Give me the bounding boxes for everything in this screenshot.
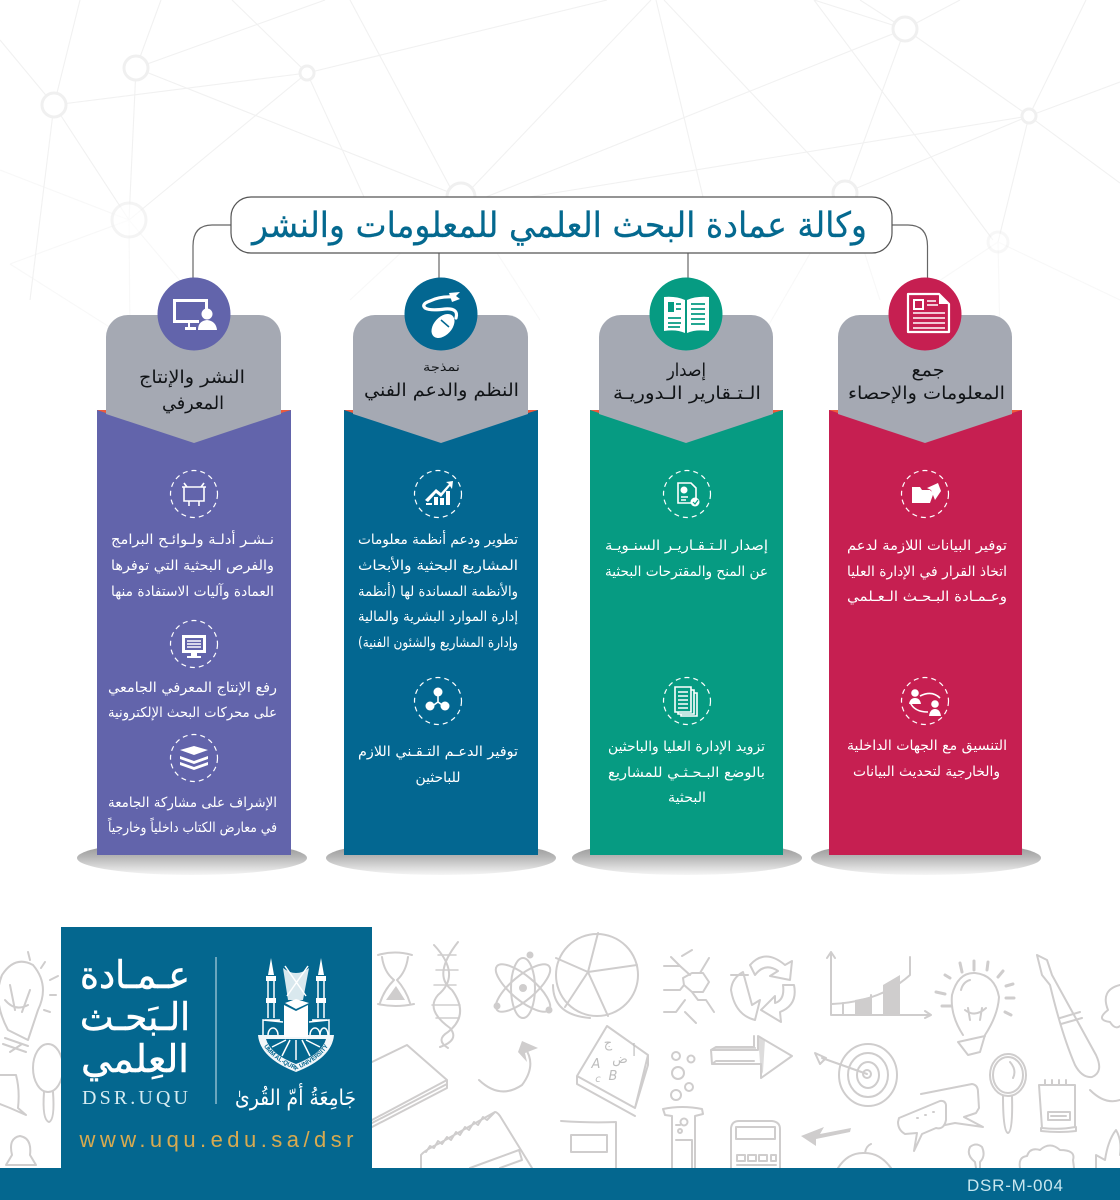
item: develop systems: تطوير ودعم أنظمة معلومات (358, 530, 518, 548)
DSR.UQU: DSR.UQU (82, 1087, 189, 1109)
item: publish guides: العمادة وآليات الاستفادة منها (111, 583, 274, 600)
doodle: hexagons (664, 950, 714, 1023)
doodle: letters: أ (632, 1043, 636, 1060)
connector: left (193, 225, 231, 279)
item: publish guides: والفرص البحثية التي توفرها (111, 558, 274, 574)
doodle: arrow (711, 1036, 792, 1078)
header (106, 315, 281, 443)
doodle: recycle (731, 956, 795, 1022)
item: raise knowledge output: رفع الإنتاج المعرفي الجامعي (108, 680, 277, 696)
item: supply status: بالوضع البـحـثـي للمشاريع (608, 765, 765, 781)
item: provide data (847, 470, 1007, 605)
item: develop systems: والأنظمة المساندة لها (أنظمة (358, 582, 518, 600)
item: develop systems: المشاريع البحثية والأبحاث (358, 556, 518, 574)
doodle: line chart (827, 952, 931, 1018)
university emblem (258, 958, 334, 1072)
doodle: letters: ج (604, 1036, 613, 1051)
item: supply status: تزويد الإدارة العليا والباحثين (608, 739, 765, 755)
doodle: atom (489, 952, 557, 1019)
item: publish guides: نـشـر أدلـة ولـوائـح البرامج (111, 530, 274, 548)
item: technical support (358, 678, 518, 786)
doodle: fountain pen (1037, 955, 1099, 1077)
item: coordination: والخارجية لتحديث البيانات (853, 764, 1000, 780)
header: المعلومات والإحصاء (848, 383, 1005, 404)
doodle: small left arrow (801, 1127, 851, 1146)
doodle: spiral notebook (421, 1112, 532, 1168)
doodle: left bulb (0, 952, 58, 1052)
item: raise knowledge output (108, 620, 277, 721)
item: supply status (608, 678, 765, 806)
panel: collecting information and statistics (811, 278, 1041, 875)
item: book fairs: في معارض الكتاب داخلياً وخارجياً (108, 817, 277, 836)
header: إصدار (666, 360, 706, 381)
item: coordination: التنسيق مع الجهات الداخلية (847, 738, 1007, 754)
doodle: pie chart (553, 933, 638, 1018)
doodle: right bulb (936, 961, 1014, 1055)
item: book fairs (108, 734, 277, 836)
doodle: right magnifier (990, 1054, 1026, 1133)
doodle: left magnifier (33, 1044, 63, 1122)
footer doodles (0, 933, 1120, 1168)
icon: open report book (650, 278, 722, 350)
panel: systems modelling and technical support (326, 278, 556, 875)
header: النظم والدعم الفني (364, 380, 519, 401)
item: annual reports: عن المنح والمقترحات البحثية (605, 564, 768, 580)
header (838, 315, 1012, 443)
deanship name: عـمـادة (80, 953, 190, 997)
icon: wrench and mouse (404, 278, 478, 350)
document code: DSR-M-004 (967, 1176, 1063, 1195)
item: annual reports (605, 470, 768, 580)
doodle: DNA (432, 942, 460, 1048)
item: supply status: البحثية (668, 790, 706, 806)
connector: centre left (438, 253, 440, 279)
item: technical support: للباحثين (416, 770, 460, 786)
doodle: bottom book (561, 1121, 616, 1168)
doodle: left speech (0, 1075, 26, 1115)
doodle: notepad (1039, 1080, 1076, 1132)
icon: document (888, 278, 962, 350)
doodle: stamp (6, 1136, 36, 1165)
item: publish guides (111, 470, 274, 600)
doodle: stacked books (372, 1045, 447, 1127)
panel: issuing periodic reports (572, 278, 802, 875)
connector: centre right (687, 253, 689, 279)
item: develop systems: وإدارة المشاريع والشئون الفنية) (358, 635, 518, 651)
doodle: hourglass (378, 952, 414, 1006)
header (599, 315, 773, 443)
doodle: letters: B (609, 1069, 618, 1084)
item: coordination (847, 678, 1007, 780)
panel: publishing and knowledge production (77, 278, 307, 875)
doodle: bottom shapes (969, 1130, 1120, 1168)
title: وكالة عمادة البحث العلمي للمعلومات والنشر (250, 206, 867, 246)
deanship name (80, 953, 190, 1081)
header: النشر والإنتاج (139, 367, 245, 388)
doodle: letters: ض (612, 1052, 628, 1067)
doodle: test tube (663, 1107, 703, 1168)
doodle: letters: A (591, 1057, 600, 1072)
item: raise knowledge output: على محركات البحث الإلكترونية (108, 705, 277, 721)
header: نمذجة (423, 360, 460, 374)
doodle: target (815, 1044, 897, 1106)
doodle: letters (591, 1036, 636, 1085)
item: annual reports: إصدار الـتـقـاريـر السنـويـة (605, 538, 768, 554)
header: جمع (912, 360, 944, 381)
item: technical support: توفير الدعـم التـقـني اللازم (358, 744, 518, 760)
doodle: speech bubbles (898, 1084, 983, 1151)
item: develop systems (358, 470, 518, 651)
background network nodes (42, 17, 1036, 252)
header: الـتـقارير الـدوريـة (613, 383, 761, 404)
divider (215, 957, 217, 1104)
item: book fairs: الإشراف على مشاركة الجامعة (108, 795, 277, 811)
item: provide data: وعـمـادة البـحـث الـعـلمي (847, 589, 1007, 605)
icon: presenter at screen (158, 278, 230, 350)
header (353, 315, 528, 443)
item: provide data: اتخاذ القرار في الإدارة العليا (847, 564, 1007, 580)
doodle: apple (838, 1144, 891, 1168)
doodle: alphabet book (577, 1026, 648, 1116)
deanship name: الـبَحـث (80, 995, 190, 1039)
doodle: bubbles (671, 1052, 694, 1100)
header: المعرفي (162, 393, 224, 414)
title box (231, 197, 892, 253)
deanship name: العِلمي (81, 1037, 189, 1081)
doodle: curved arrow (479, 1041, 538, 1091)
item: develop systems: إدارة الموارد البشرية والمالية (358, 609, 518, 625)
item: provide data: توفير البيانات اللازمة لدعم (847, 538, 1007, 554)
connector: right (892, 225, 928, 279)
university arabic name: جَامِعَةُ أمّ القُرىٰ (235, 1083, 356, 1111)
doodle: letters: c (595, 1074, 601, 1085)
university emblem: UMM AL-QURA UNIVERSITY (264, 1044, 328, 1070)
bottom bar (0, 1168, 1120, 1200)
doodle: right atom (1090, 985, 1120, 1101)
website: www.uqu.edu.sa/dsr (78, 1127, 354, 1152)
doodle: calculator (731, 1121, 780, 1168)
logo panel (61, 927, 372, 1168)
